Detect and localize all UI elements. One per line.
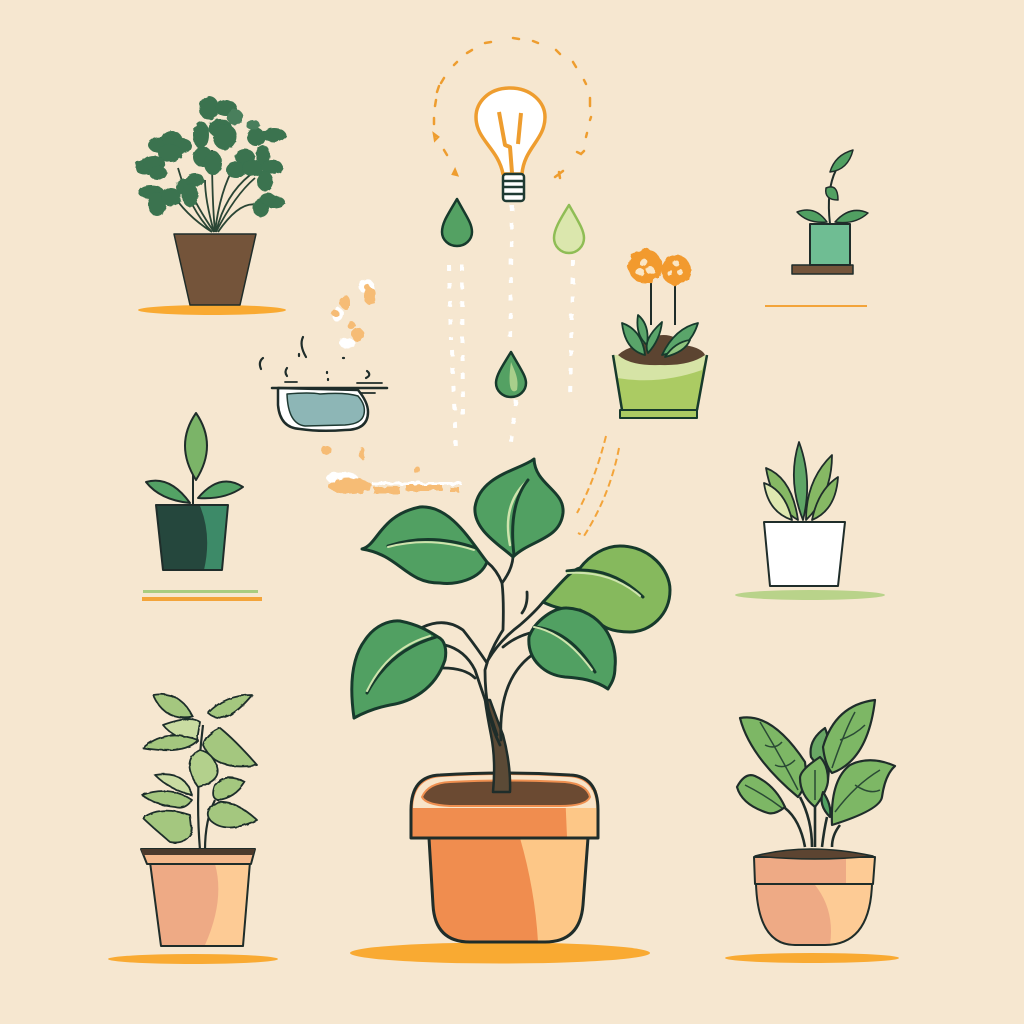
potted plant: middle right	[735, 442, 885, 600]
speckled trail	[321, 279, 462, 494]
potted plant: top left	[135, 96, 286, 315]
potted plant: top right	[765, 150, 868, 307]
leaf: upper left	[362, 507, 487, 583]
dashed orange arcs	[577, 436, 619, 536]
potted plant: bottom right	[725, 700, 899, 963]
water drops	[442, 199, 584, 397]
dashed arc around bulb	[434, 38, 591, 178]
leaf: top	[475, 459, 563, 557]
potted plant: middle left	[142, 413, 262, 601]
leaf: lower right	[529, 608, 615, 689]
falling water dashes	[449, 205, 573, 450]
potted plant: bottom left	[108, 694, 278, 964]
leaf: lower left	[352, 621, 446, 718]
flowering plant in green pot	[613, 249, 707, 418]
central potted plant	[350, 459, 670, 964]
light bulb	[476, 88, 545, 201]
bowl with water	[260, 337, 387, 431]
leaf: upper right	[543, 546, 670, 632]
